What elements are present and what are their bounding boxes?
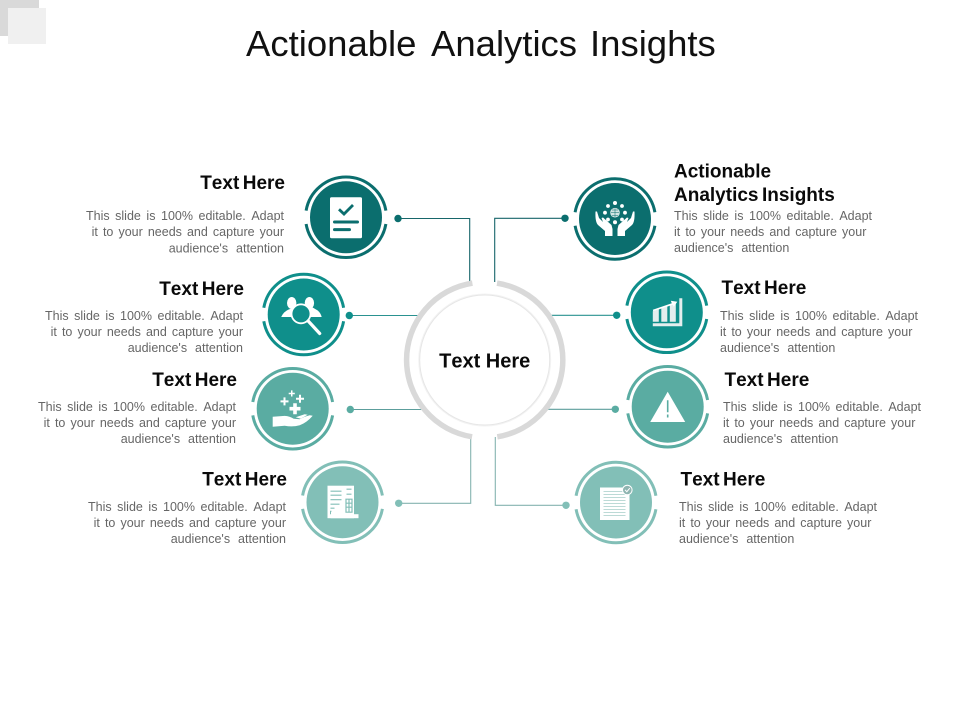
- node: warning triangle (lower right): [628, 366, 708, 447]
- text block: lower left: [38, 370, 237, 446]
- description: it to your needs and capture your: [51, 325, 243, 339]
- text block: bottom left: [88, 470, 287, 546]
- text block: upper left: [45, 279, 244, 355]
- connector: lower left: [347, 406, 422, 413]
- icon: magnifier over people: [281, 297, 322, 334]
- node: hand with sparkles (lower left): [253, 368, 333, 449]
- description: it to your needs and capture your: [92, 225, 284, 239]
- central hub: [407, 283, 563, 437]
- node: people search (upper left): [264, 274, 344, 355]
- icon: hands and network globe: [595, 201, 635, 236]
- connector: upper left: [346, 312, 418, 319]
- node: report with badge (bottom right): [576, 462, 656, 543]
- text block: bottom right: [679, 470, 878, 546]
- node: growth chart (upper right): [627, 272, 707, 353]
- connector: bottom left: [395, 437, 471, 507]
- description: This slide is 100% editable. Adapt: [86, 209, 285, 223]
- text block: bottom left: Text Here: [202, 470, 287, 490]
- node: spreadsheet document (bottom left): [303, 462, 382, 542]
- description: [45, 309, 244, 355]
- description: audience's attention: [171, 532, 286, 546]
- description: [674, 209, 873, 255]
- description: audience's attention: [679, 532, 794, 546]
- text block: upper right: [720, 278, 919, 355]
- description: audience's attention: [720, 341, 835, 355]
- text block: top right: Analytics Insights: [674, 185, 835, 206]
- description: This slide is 100% editable. Adapt: [723, 400, 922, 414]
- text block: top right: Actionable: [674, 162, 771, 183]
- text block: lower left: Text Here: [152, 370, 237, 391]
- connector: upper right: [552, 312, 620, 319]
- description: This slide is 100% editable. Adapt: [45, 309, 244, 323]
- description: This slide is 100% editable. Adapt: [88, 500, 287, 514]
- text block: top right: [674, 162, 873, 255]
- description: audience's attention: [723, 432, 838, 446]
- icon: document with check badge: [600, 485, 632, 520]
- text block: upper right: Text Here: [722, 278, 806, 299]
- icon: hand with plus signs: [273, 390, 313, 427]
- description: This slide is 100% editable. Adapt: [674, 209, 873, 223]
- description: audience's attention: [674, 241, 789, 255]
- description: it to your needs and capture your: [674, 225, 866, 239]
- icon: warning: [650, 392, 685, 422]
- corner decoration squares: [0, 0, 46, 44]
- text block: bottom right: Text Here: [680, 470, 765, 490]
- connector: top right: [495, 215, 569, 282]
- description: [679, 500, 878, 546]
- node: checklist document (top left): [306, 177, 386, 258]
- description: it to your needs and capture your: [44, 416, 236, 430]
- description: [723, 400, 922, 446]
- icon: bar chart with arrow: [653, 298, 682, 326]
- text block: lower right: Text Here: [724, 370, 809, 391]
- description: [86, 209, 285, 255]
- description: audience's attention: [128, 341, 243, 355]
- icon: checklist: [330, 197, 362, 238]
- title: Actionable: [246, 23, 416, 64]
- description: it to your needs and capture your: [720, 325, 912, 339]
- description: it to your needs and capture your: [723, 416, 915, 430]
- node: hands holding globe (top right): [575, 179, 655, 259]
- description: audience's attention: [169, 241, 284, 255]
- description: This slide is 100% editable. Adapt: [38, 400, 237, 414]
- description: This slide is 100% editable. Adapt: [679, 500, 878, 514]
- connector: top left: [394, 215, 470, 282]
- text block: top left: [86, 173, 285, 255]
- description: This slide is 100% editable. Adapt: [720, 309, 919, 323]
- description: it to your needs and capture your: [679, 516, 871, 530]
- connector: bottom right: [495, 437, 570, 509]
- description: audience's attention: [121, 432, 236, 446]
- hub label: Text Here: [439, 350, 530, 372]
- title: Analytics: [431, 23, 577, 64]
- text block: lower right: [723, 370, 922, 446]
- description: [88, 500, 287, 546]
- title: Insights: [590, 23, 716, 64]
- text block: upper left: Text Here: [159, 279, 244, 300]
- icon: document with table: [328, 486, 358, 518]
- description: [720, 309, 919, 355]
- description: [38, 400, 237, 446]
- description: it to your needs and capture your: [94, 516, 286, 530]
- connector: lower right: [548, 406, 619, 413]
- text block: top left: Text Here: [200, 173, 285, 194]
